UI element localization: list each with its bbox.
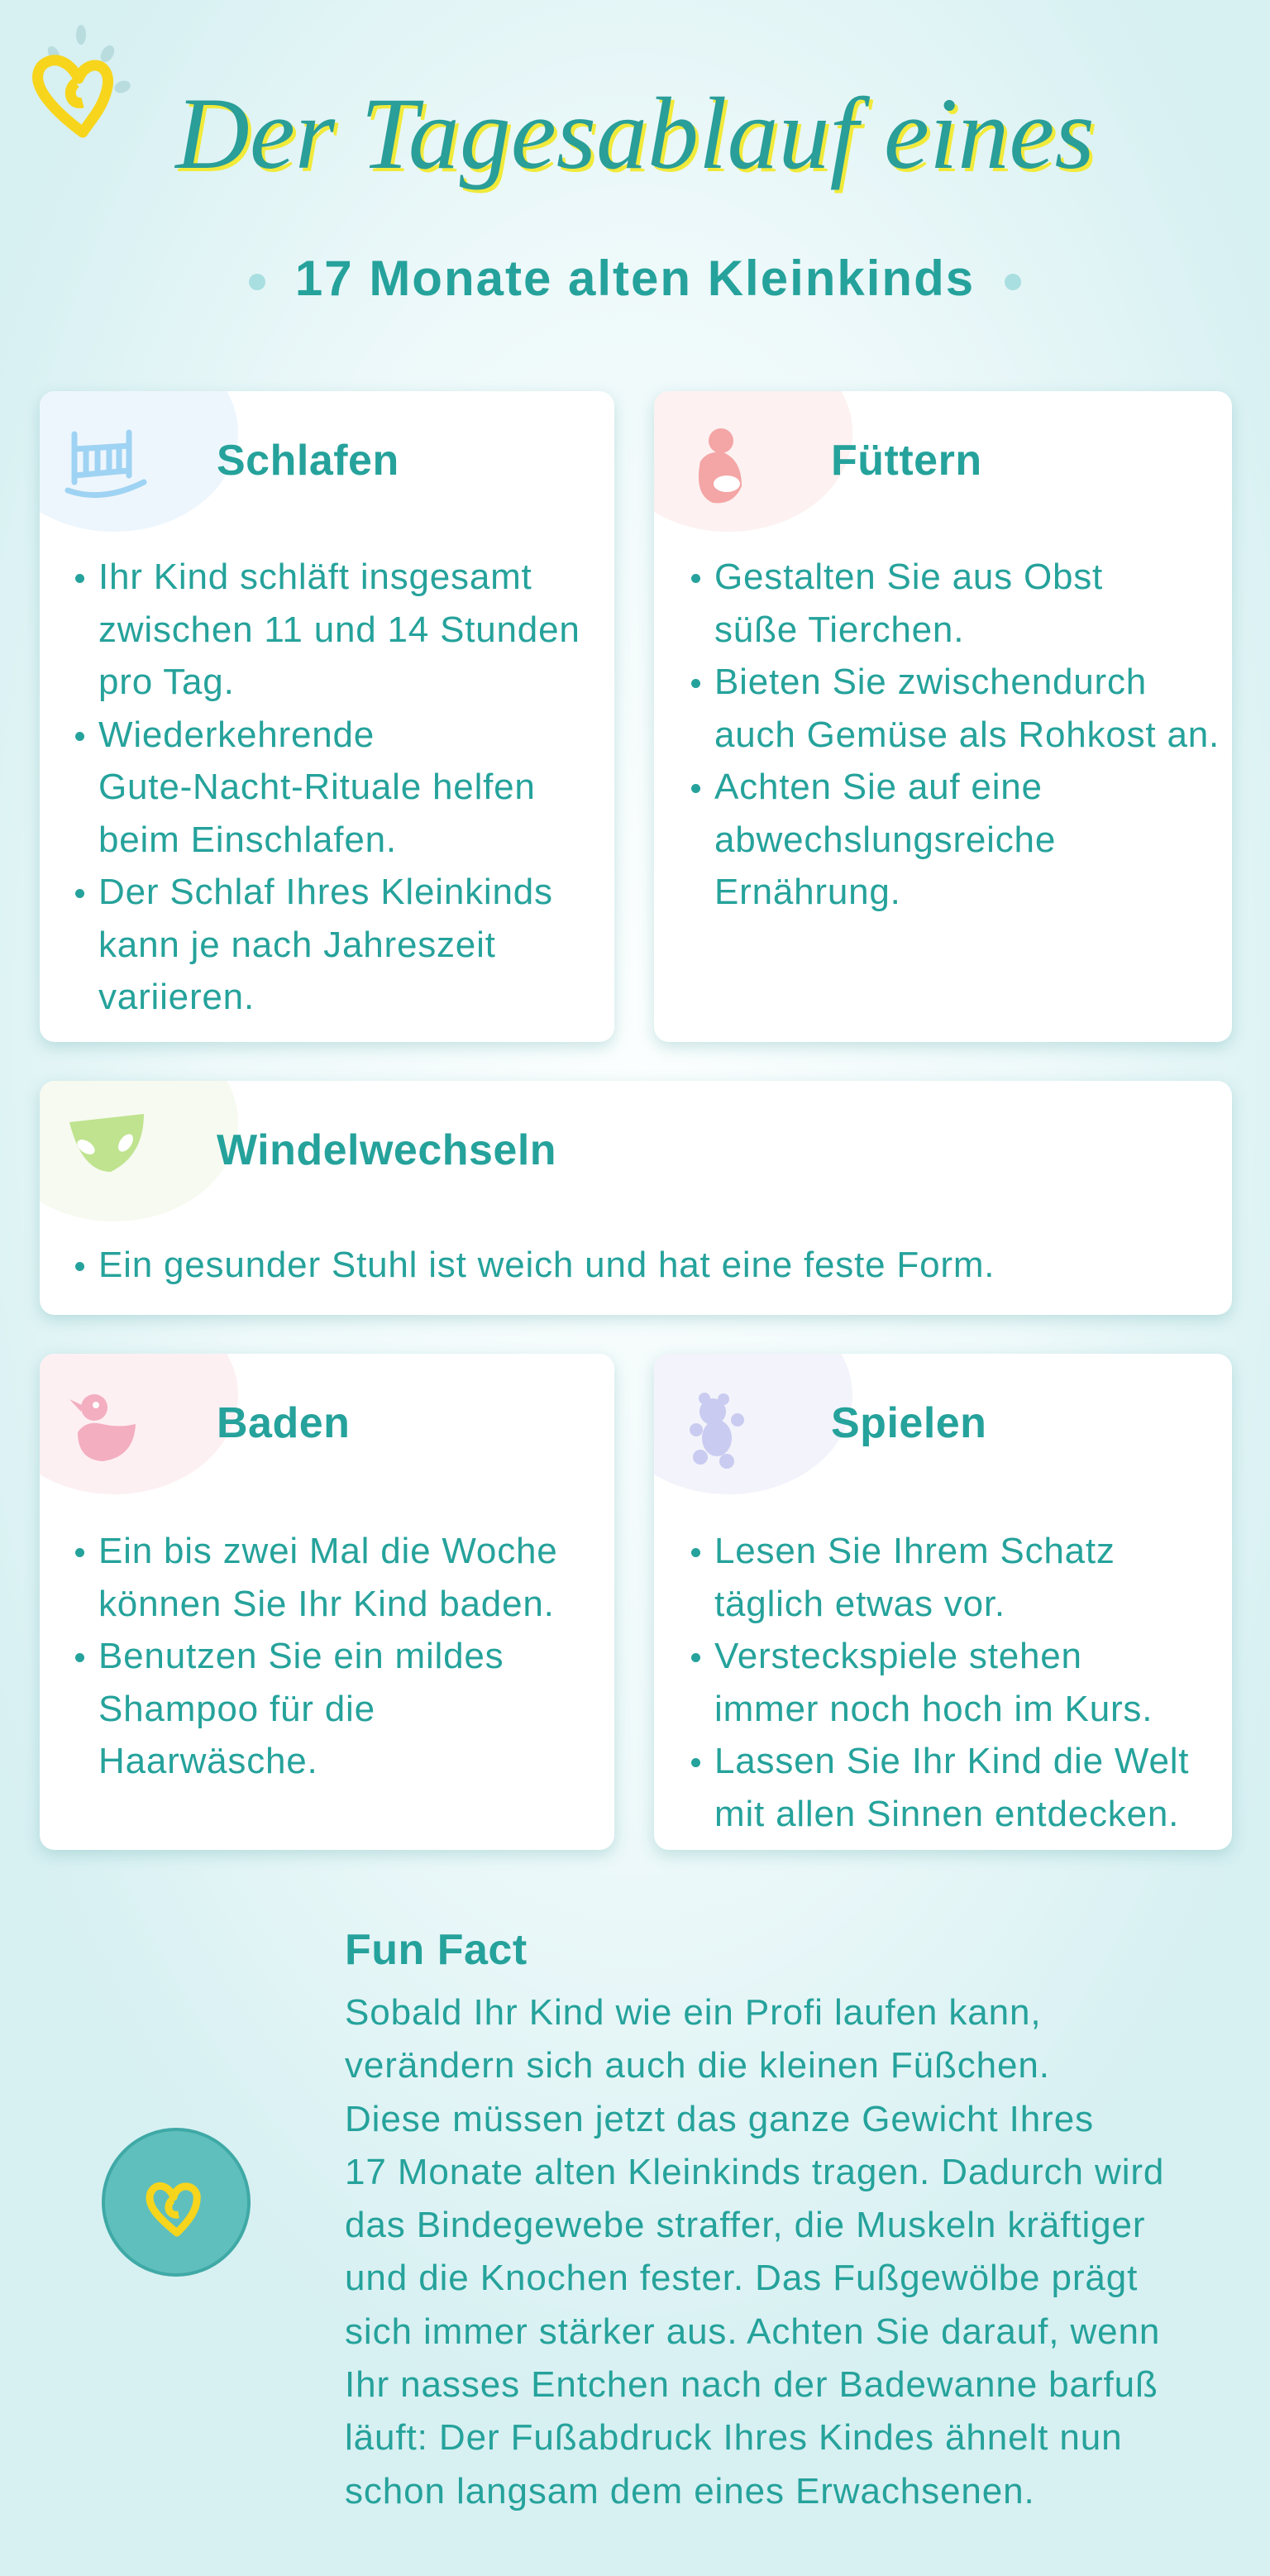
bullet list: variieren. — [98, 977, 255, 1017]
icon: duck — [69, 1394, 136, 1461]
bullet list: Wiederkehrende — [98, 714, 375, 754]
bullet list: Lassen Sie Ihr Kind die Welt — [714, 1741, 1189, 1781]
bullet list — [75, 557, 580, 1017]
heading: Windelwechseln — [217, 1126, 556, 1174]
bullet list: Ernährung. — [714, 872, 901, 912]
bullet list: Bieten Sie zwischendurch — [714, 662, 1147, 702]
fun fact text: das Bindegewebe straffer, die Muskeln kräftiger — [345, 2205, 1145, 2245]
bullet list: beim Einschlafen. — [98, 819, 397, 860]
fun fact text: 17 Monate alten Kleinkinds tragen. Dadurch wird — [345, 2152, 1164, 2192]
fun fact text: verändern sich auch die kleinen Füßchen. — [345, 2045, 1050, 2086]
fun fact text: schon langsam dem eines Erwachsenen. — [345, 2471, 1035, 2511]
fun fact text — [345, 1992, 1164, 2511]
icon: diaper — [69, 1114, 144, 1172]
bullet list: Ihr Kind schläft insgesamt — [98, 557, 532, 597]
fun fact text: läuft: Der Fußabdruck Ihres Kindes ähnelt nun — [345, 2417, 1123, 2458]
bullet list: Der Schlaf Ihres Kleinkinds — [98, 872, 553, 912]
bullet list — [691, 1531, 1189, 1834]
bullet list: Lesen Sie Ihrem Schatz — [714, 1531, 1115, 1571]
bullet list: auch Gemüse als Rohkost an. — [714, 714, 1220, 754]
heading: Schlafen — [217, 437, 399, 485]
bullet list: zwischen 11 und 14 Stunden — [98, 609, 580, 650]
logo — [32, 25, 131, 137]
heading: Baden — [217, 1399, 350, 1447]
icon: mother feeding — [698, 428, 742, 503]
bullet list: Haarwäsche. — [98, 1741, 318, 1781]
bullet list: kann je nach Jahreszeit — [98, 925, 496, 964]
bullet list: Benutzen Sie ein mildes — [98, 1636, 504, 1676]
bullet list: Gute-Nacht-Rituale helfen — [98, 767, 536, 807]
bullet list: Gestalten Sie aus Obst — [714, 557, 1103, 597]
title: Der Tagesablauf eines — [175, 77, 1095, 190]
bullet list: pro Tag. — [98, 662, 235, 702]
fun fact text: Diese müssen jetzt das ganze Gewicht Ihres — [345, 2099, 1094, 2139]
panel: Windelwechseln — [40, 1081, 1232, 1315]
fun fact text: Ihr nasses Entchen nach der Badewanne barfuß — [345, 2364, 1158, 2405]
panel: Baden — [40, 1354, 614, 1850]
icon: crib — [64, 430, 147, 498]
icon: teddy bear — [690, 1393, 744, 1469]
bullet list: Shampoo für die — [98, 1689, 375, 1728]
bullet list: mit allen Sinnen entdecken. — [714, 1793, 1179, 1834]
heading: Füttern — [831, 437, 982, 485]
fun fact heading: Fun Fact — [345, 1926, 528, 1974]
bullet list: abwechslungsreiche — [714, 819, 1056, 860]
panel: Füttern — [654, 391, 1232, 1042]
fun fact text: sich immer stärker aus. Achten Sie darauf, wenn — [345, 2311, 1160, 2352]
bullet list: Ein gesunder Stuhl ist weich und hat eine feste Form. — [98, 1245, 995, 1285]
panel: Spielen — [654, 1354, 1232, 1850]
bullet list: süße Tierchen. — [714, 609, 964, 650]
bullet list: Ein bis zwei Mal die Woche — [98, 1531, 558, 1571]
subtitle: 17 Monate alten Kleinkinds — [295, 251, 975, 306]
fun fact text: und die Knochen fester. Das Fußgewölbe prägt — [345, 2258, 1138, 2298]
bullet list: Achten Sie auf eine — [714, 767, 1043, 807]
panel: Schlafen — [40, 391, 614, 1042]
icon: heart circle — [102, 2128, 251, 2277]
bullet list — [75, 1531, 558, 1781]
heading: Spielen — [831, 1399, 986, 1447]
fun fact text: Sobald Ihr Kind wie ein Profi laufen kann, — [345, 1992, 1042, 2033]
bullet list: können Sie Ihr Kind baden. — [98, 1583, 555, 1624]
bullet list — [691, 557, 1220, 912]
bullet list: immer noch hoch im Kurs. — [714, 1689, 1153, 1728]
bullet list: täglich etwas vor. — [714, 1583, 1005, 1624]
bullet list: Versteckspiele stehen — [714, 1636, 1082, 1676]
